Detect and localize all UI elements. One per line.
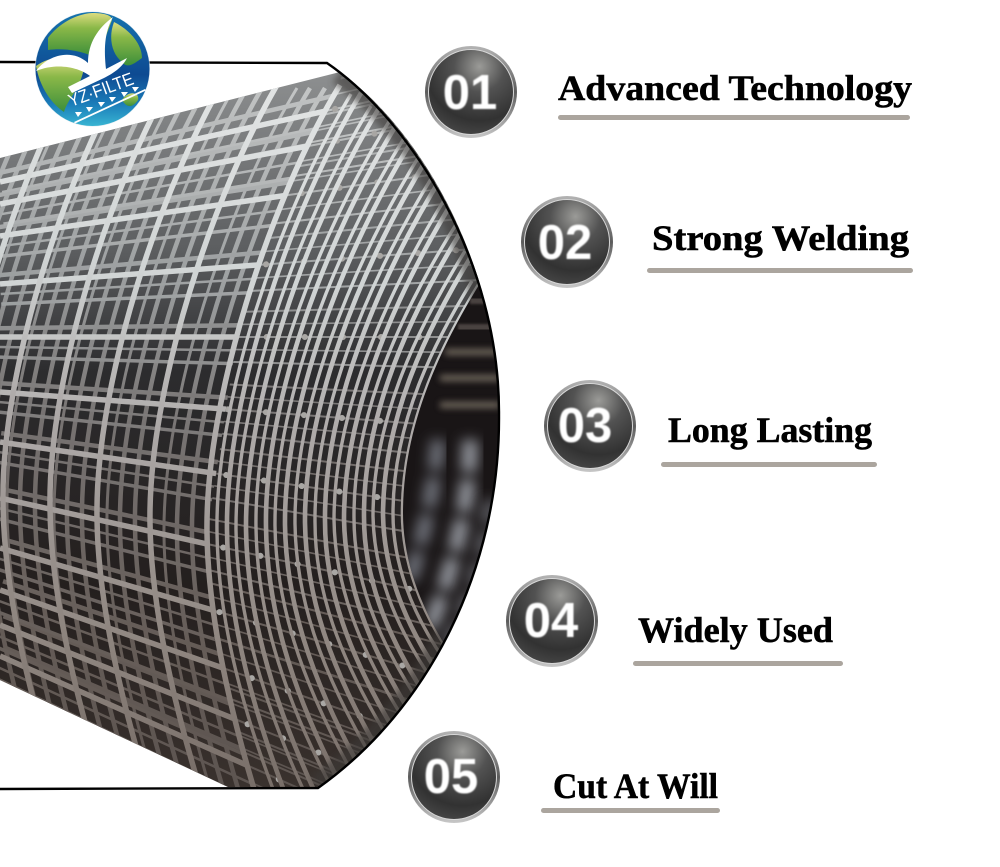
dense cross ties on the curved side xyxy=(210,77,476,787)
feature 3 heading: Long Lasting xyxy=(668,410,872,450)
badge 05 xyxy=(408,731,500,823)
logo continents xyxy=(36,13,142,112)
badge 03 xyxy=(544,380,636,472)
feature 5 heading: Cut At Will xyxy=(553,766,718,806)
badge 05: 05 xyxy=(424,750,478,804)
logo wordmark: YZ·FILTE xyxy=(66,69,136,111)
wire mesh roll photo xyxy=(0,72,498,787)
logo bird xyxy=(36,17,127,93)
feature 4 underline xyxy=(633,661,843,666)
frame outline around roll xyxy=(0,62,499,789)
badge 03: 03 xyxy=(558,399,612,453)
badge 04: 04 xyxy=(524,594,578,648)
feature 1 underline xyxy=(558,115,910,120)
soft shaded rim near the roll end xyxy=(318,72,499,787)
badge 02 xyxy=(521,196,613,288)
badge 01: 01 xyxy=(443,66,497,120)
badge 01 xyxy=(425,46,517,138)
feature 1 heading: Advanced Technology xyxy=(558,68,912,108)
front horizontal rods xyxy=(0,108,324,768)
logo: YZ-FILTE globe xyxy=(35,12,150,126)
badge 02: 02 xyxy=(538,216,592,270)
feature 4 heading: Widely Used xyxy=(638,610,833,650)
feature 3 underline xyxy=(661,462,877,467)
feature 2 heading: Strong Welding xyxy=(652,218,909,258)
curved longitudinal wires xyxy=(0,45,482,815)
feature 2 underline xyxy=(647,268,913,273)
feature 5 underline xyxy=(541,808,720,813)
dark interior of roll xyxy=(403,285,498,642)
back layer of the mesh seen through the front xyxy=(0,87,332,787)
logo underline and arrows xyxy=(74,87,146,124)
badge 04 xyxy=(506,575,598,667)
